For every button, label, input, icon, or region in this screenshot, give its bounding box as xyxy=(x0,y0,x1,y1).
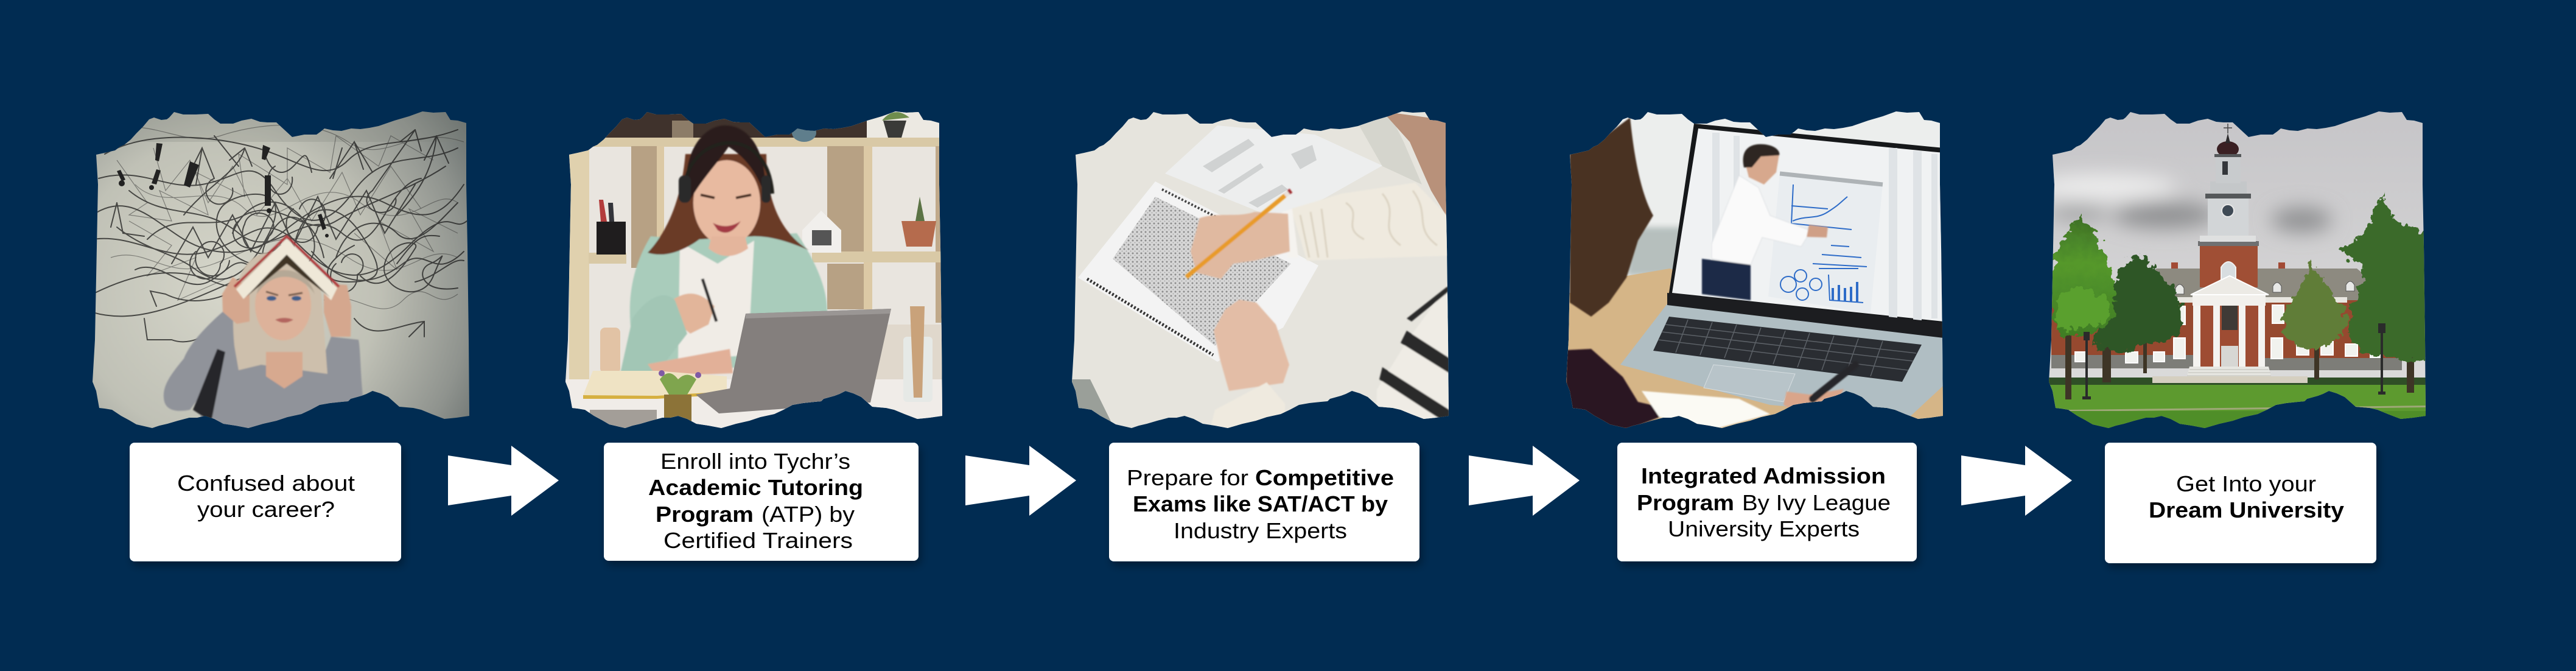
arrow: step 4 to step 5 xyxy=(1961,446,2072,516)
icon: laptop xyxy=(696,309,891,413)
lawn xyxy=(2049,376,2426,434)
card: dream university xyxy=(2105,443,2376,563)
panel: step 1 confused about career xyxy=(93,111,470,561)
arrow: step 3 to step 4 xyxy=(1469,446,1580,516)
card: integrated admission program: By Ivy League xyxy=(1742,490,1891,515)
card: dream university: Get Into your xyxy=(2176,471,2316,496)
flip chart xyxy=(1768,174,1883,314)
card: dream university: Dream University xyxy=(2149,497,2344,522)
clouds xyxy=(2031,174,2332,232)
portico xyxy=(2191,276,2269,295)
panel: step 4 integrated admission program xyxy=(1566,111,1944,561)
dormers xyxy=(2175,281,2354,294)
card: academic tutoring program: Program xyxy=(656,502,754,527)
chimneys xyxy=(2171,262,2285,269)
trees xyxy=(2051,195,2429,399)
photo: student with headset and laptop xyxy=(565,111,943,434)
panel: step 3 competitive exams xyxy=(1072,111,1449,561)
arrow: step 2 to step 3 xyxy=(965,446,1076,516)
card: integrated admission program: Program xyxy=(1637,490,1734,515)
exam paper: back sheet xyxy=(1165,125,1382,222)
card: competitive exams: Industry Experts xyxy=(1174,518,1347,543)
icon: glass of pencils xyxy=(903,306,933,402)
card: confused about career: Confused about xyxy=(177,471,355,496)
lamp posts xyxy=(2082,323,2385,399)
windows xyxy=(2075,305,2381,363)
icon: potted plant xyxy=(659,370,701,422)
card: competitive exams xyxy=(1109,443,1419,561)
card: academic tutoring program: (ATP) by xyxy=(761,502,855,527)
exam paper: answer sheet xyxy=(1078,181,1318,362)
panel: step 2 academic tutoring xyxy=(565,111,943,561)
arrow: step 1 to step 2 xyxy=(448,446,559,516)
building xyxy=(2051,124,2402,379)
icon: exclamation marks xyxy=(117,143,329,237)
laptop screen xyxy=(1667,124,1944,338)
card: confused about career: your career? xyxy=(197,497,335,522)
card: competitive exams: Competitive xyxy=(1255,465,1394,490)
card: confused about career xyxy=(130,443,401,561)
tower xyxy=(2198,124,2259,287)
card: competitive exams: Exams like SAT/ACT by xyxy=(1133,491,1388,516)
photo: confused woman under book xyxy=(93,111,470,434)
laptop base and keyboard xyxy=(1620,293,1944,417)
figure: viewer hair, sweater, hand and pen xyxy=(1566,118,1855,429)
figure: woman xyxy=(164,236,366,434)
card: academic tutoring program xyxy=(604,443,919,561)
figure: presenter xyxy=(1702,144,1828,300)
card: academic tutoring program: Academic Tutoring xyxy=(648,475,863,500)
icon: shelf items xyxy=(597,112,936,255)
figure: hands, pencil and sweater xyxy=(1186,183,1449,434)
card: academic tutoring program: Enroll into Tychr’s xyxy=(660,449,850,474)
photo: filling in an answer sheet xyxy=(1072,111,1449,434)
card: integrated admission program: University Experts xyxy=(1668,516,1860,541)
icon: notebook xyxy=(583,371,727,399)
card: competitive exams: Prepare for xyxy=(1127,465,1248,490)
figure: student xyxy=(620,125,827,376)
panel: step 5 dream university xyxy=(2031,111,2429,563)
photo: university building xyxy=(2031,111,2429,434)
photo: online lesson on laptop xyxy=(1566,111,1944,429)
card: integrated admission program: Integrated Admission xyxy=(1641,463,1886,488)
card: integrated admission program xyxy=(1617,443,1917,561)
card: academic tutoring program: Certified Trainers xyxy=(663,528,853,553)
